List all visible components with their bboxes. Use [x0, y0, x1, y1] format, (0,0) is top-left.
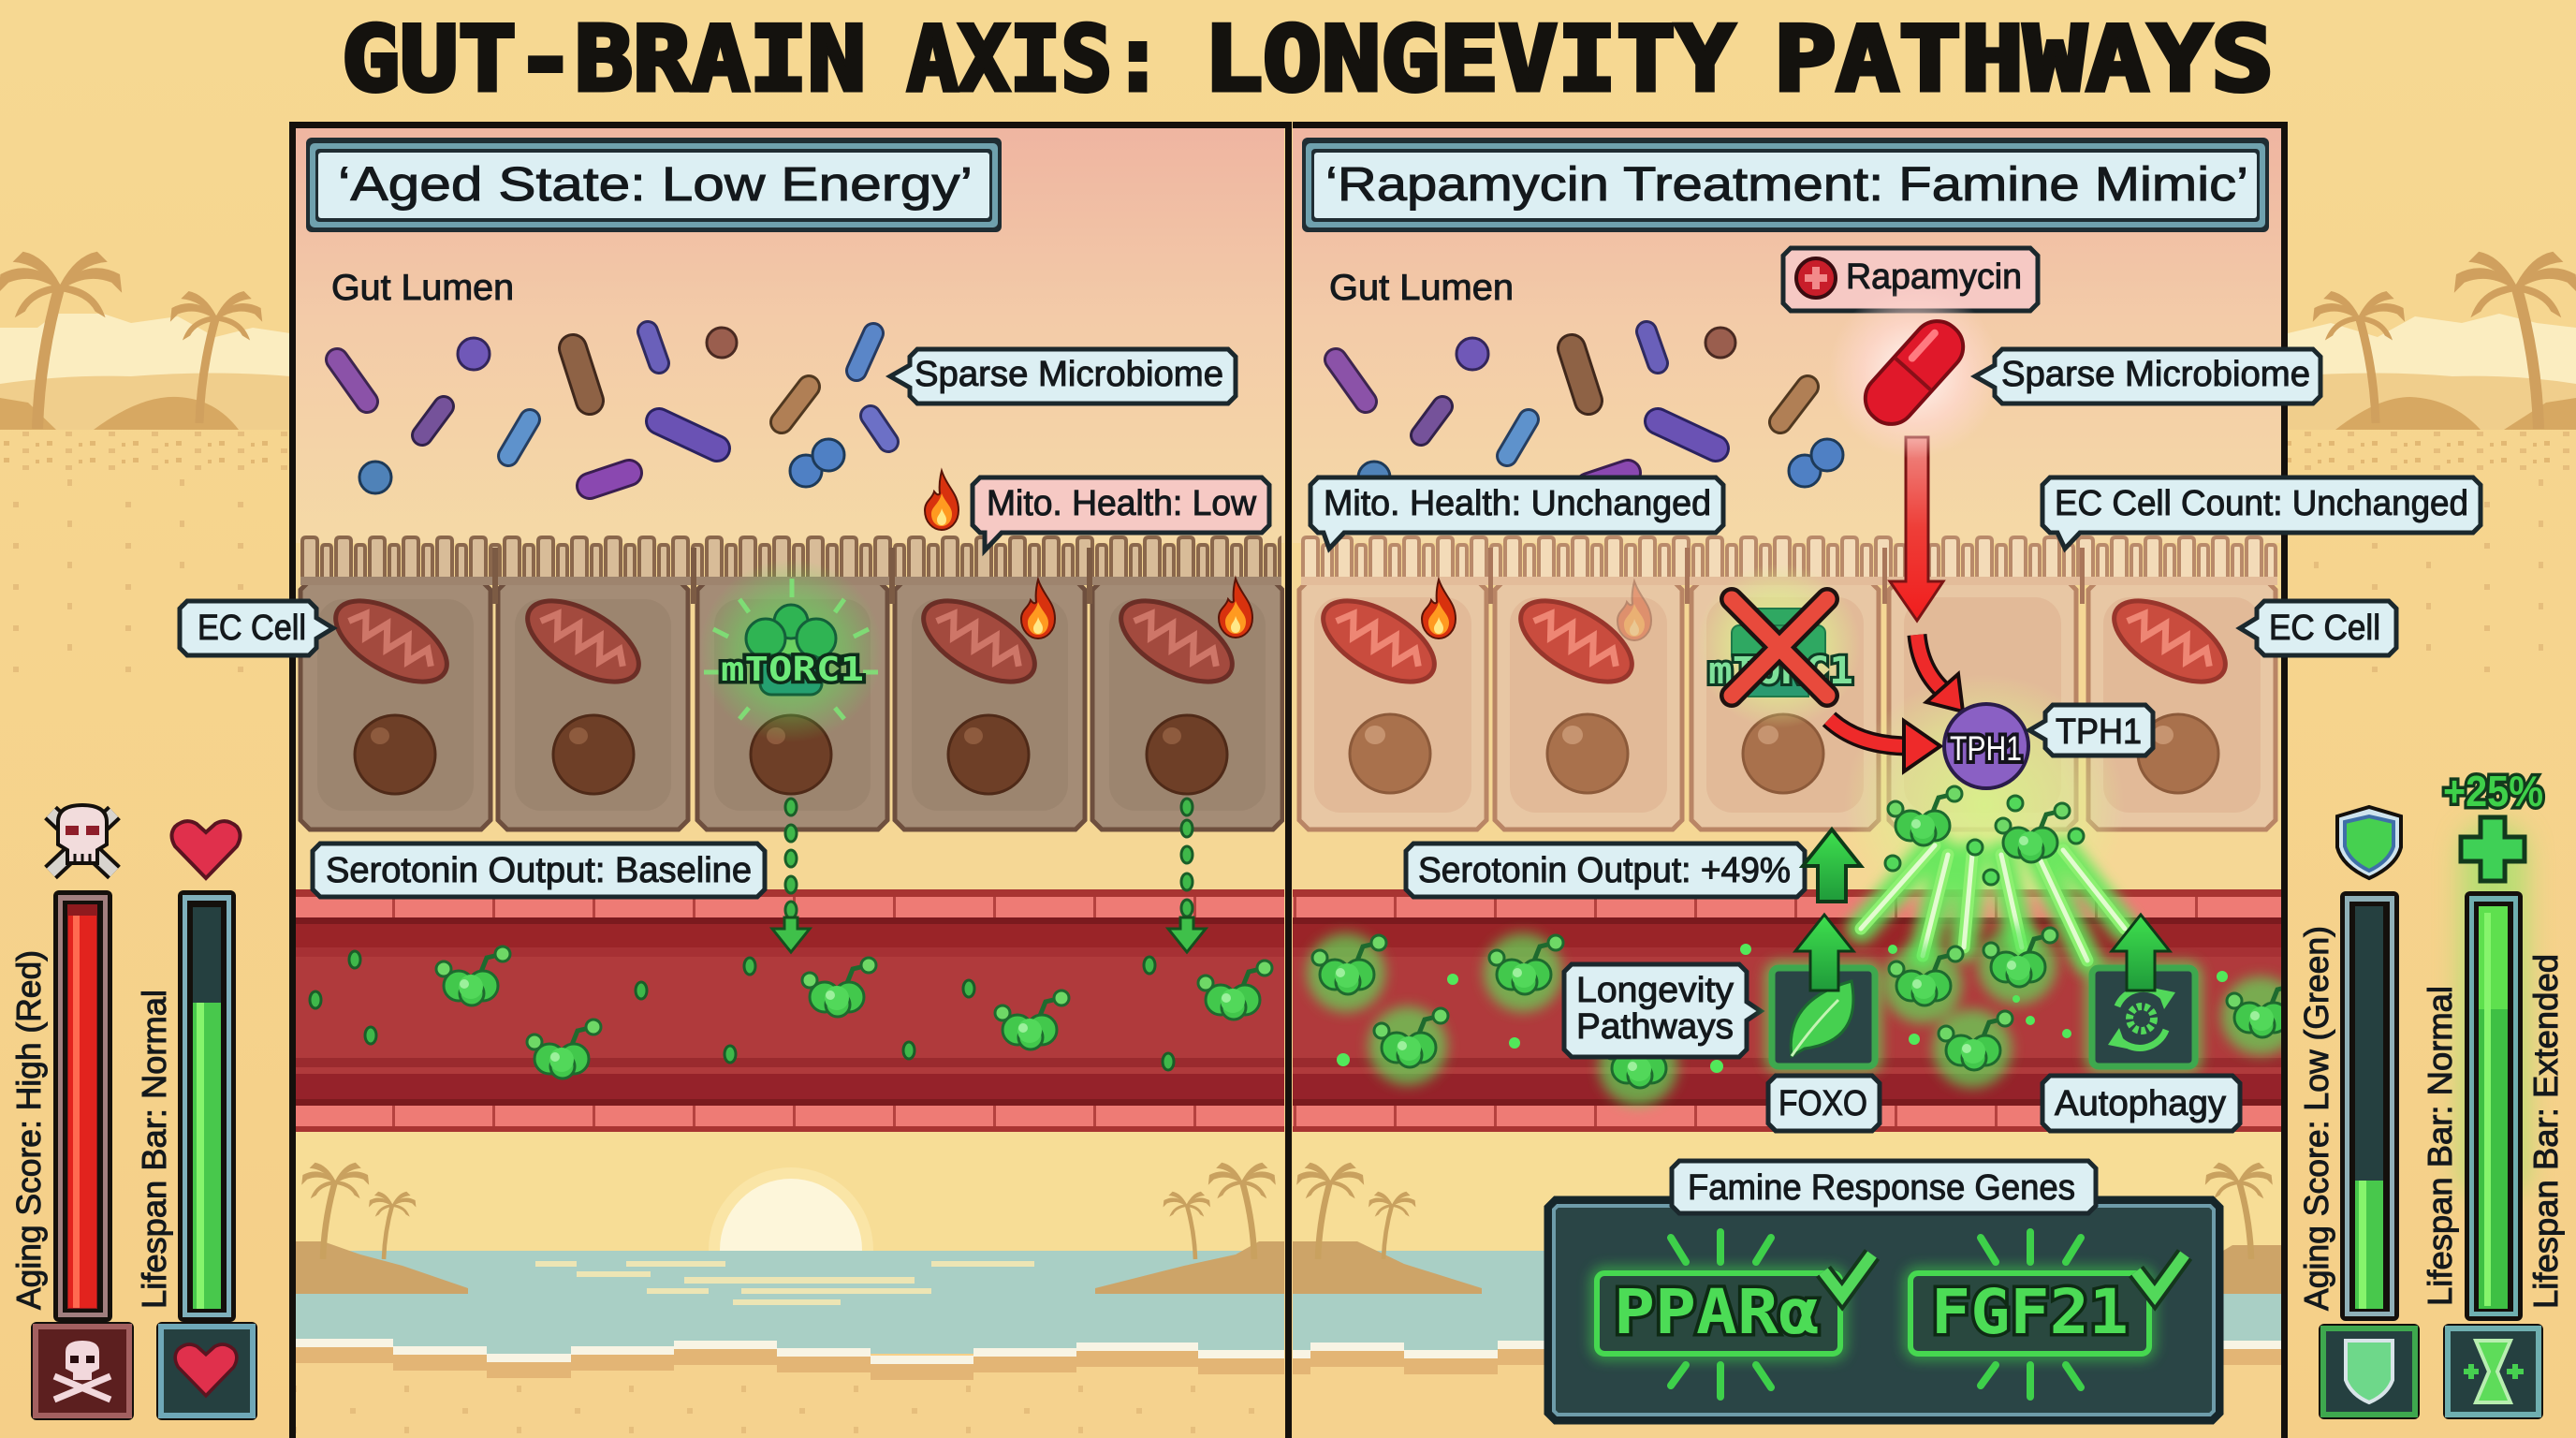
state heading: aged: ‘Aged State: Low Energy’ — [338, 157, 973, 211]
label: famine response genes: Famine Response Genes — [1688, 1168, 2075, 1208]
base: shield — [2319, 1324, 2420, 1419]
label: serotonin +49%: Serotonin Output: +49% — [1418, 851, 1791, 890]
gene: PPAR alpha — [1597, 1232, 1872, 1397]
icon: plus — [2461, 817, 2525, 881]
label: EC cell — [180, 601, 333, 655]
beach scene — [1293, 1132, 2281, 1374]
icon: shield — [2337, 807, 2401, 878]
mitochondria — [333, 598, 1235, 684]
mTORC1 complex: mTORC1 — [721, 651, 864, 689]
bar: lifespan green — [178, 890, 236, 1322]
arrow: curved from mTORC1 to TPH1 — [1829, 719, 1940, 771]
base: hourglass — [2443, 1324, 2543, 1419]
panel: rapamycin treatment — [1293, 122, 2482, 1438]
beach scene — [296, 1132, 1284, 1433]
label: mito health unchanged: Mito. Health: Unchanged — [1324, 484, 1711, 523]
gene: FGF21: FGF21 — [1931, 1276, 2129, 1348]
panel: aged state — [178, 122, 1292, 1438]
label: plus 25 percent: +25% — [2443, 767, 2543, 815]
icon: skull and crossbones — [51, 805, 114, 873]
label: lifespan extended: Lifespan Bar: Extended — [2526, 954, 2565, 1309]
base: heart — [156, 1322, 257, 1420]
arrow: autophagy up — [2112, 915, 2170, 990]
TPH1 enzyme: TPH1 — [1950, 729, 2022, 768]
green serotonin rays — [1861, 845, 2125, 961]
title: PATHWAYS — [1774, 8, 2274, 111]
sparse microbiome bacteria — [1336, 328, 1843, 493]
label: EC cell count unchanged: EC Cell Count: Unchanged — [2055, 484, 2468, 523]
icon: autophagy cycle — [2092, 968, 2195, 1066]
panel border — [292, 125, 1288, 1438]
label: FOXO — [1768, 1076, 1880, 1131]
gene: PPAR alpha: PPARα — [1614, 1276, 1820, 1348]
label: gut lumen: Gut Lumen — [331, 268, 514, 308]
label: autophagy — [2042, 1076, 2240, 1131]
bar: aging red — [53, 890, 112, 1322]
arrow: serotonin release left — [772, 799, 810, 952]
label: longevity pathways — [1564, 964, 1761, 1057]
label: longevity pathways: Longevity — [1576, 971, 1734, 1010]
label: rapamycin: Rapamycin — [1846, 257, 2022, 297]
state heading: rapamycin: ‘Rapamycin Treatment: Famine Mimic’ — [1325, 157, 2248, 211]
bar: lifespan extended — [2465, 891, 2523, 1321]
flames — [1422, 580, 1651, 640]
gauge: aging score low — [2297, 807, 2420, 1419]
arrow: FOXO up — [1795, 915, 1853, 990]
gauge: lifespan extended — [2421, 767, 2543, 1419]
mTORC1 complex — [699, 559, 883, 742]
glow — [2460, 824, 2527, 1198]
flames — [1021, 579, 1252, 638]
title: AXIS: — [907, 8, 1164, 111]
base: skull — [31, 1322, 134, 1420]
label: serotonin baseline — [313, 844, 765, 897]
mitochondria — [1310, 584, 2238, 698]
label: EC cell: EC Cell — [2269, 609, 2380, 648]
label: longevity pathways: Pathways — [1576, 1007, 1734, 1047]
mTORC1 inhibited: mTORC1 — [1708, 650, 1853, 693]
label: FOXO: FOXO — [1778, 1084, 1867, 1123]
arrow: serotonin up — [1803, 829, 1861, 902]
panel: famine response genes — [1548, 1161, 2219, 1420]
arrow: rapamycin down — [1890, 437, 1943, 621]
label: EC cell — [2240, 601, 2396, 655]
label: sparse microbiome — [890, 349, 1236, 404]
arrow: serotonin release right — [1168, 799, 1206, 952]
title: GUT-BRAIN — [342, 8, 866, 111]
label: sparse microbiome: Sparse Microbiome — [915, 355, 1223, 394]
arrow: curved to TPH1 top — [1917, 635, 1963, 712]
label: mito health low — [973, 477, 1269, 550]
label: mito health unchanged — [1310, 477, 1723, 549]
gauge: lifespan normal — [135, 821, 257, 1420]
microvilli — [1301, 534, 2277, 604]
background scene: left palms — [0, 252, 290, 678]
mTORC1 inhibited — [1706, 568, 1855, 725]
label: autophagy: Autophagy — [2055, 1084, 2226, 1123]
label: sparse microbiome — [1975, 349, 2320, 404]
EC cells — [1299, 580, 2276, 829]
title — [342, 8, 2274, 111]
label: aging score high: Aging Score: High (Red) — [9, 950, 48, 1310]
icon: heart — [172, 821, 240, 878]
TPH1 and green glow — [1853, 687, 2115, 932]
bar: aging green — [2340, 891, 2399, 1321]
gauge: aging score high — [9, 805, 134, 1420]
label: mito health low: Mito. Health: Low — [987, 484, 1257, 523]
gene: FGF21 — [1910, 1232, 2185, 1397]
label: lifespan normal: Lifespan Bar: Normal — [135, 990, 173, 1309]
panel border — [1293, 125, 2284, 1438]
blood vessel — [295, 889, 1284, 1132]
microvilli — [300, 534, 1281, 604]
icon: rapamycin pill — [1828, 286, 2000, 459]
serotonin burst — [1885, 786, 2084, 885]
TPH1 enzyme — [1944, 704, 2028, 788]
state heading: rapamycin — [1302, 138, 2269, 232]
serotonin molecules — [1307, 926, 2301, 1106]
nuclei — [1350, 714, 2218, 793]
state heading: aged — [306, 138, 1002, 232]
icon: flame — [925, 471, 959, 530]
label: lifespan normal: Lifespan Bar: Normal — [2421, 986, 2459, 1306]
sparse microbiome bacteria — [337, 328, 888, 493]
serotonin molecules — [310, 946, 1272, 1078]
label: EC cell count unchanged — [2042, 477, 2481, 549]
label: sparse microbiome: Sparse Microbiome — [2001, 355, 2310, 394]
nuclei — [355, 715, 1227, 794]
label: aging score low: Aging Score: Low (Green) — [2297, 926, 2335, 1311]
label: rapamycin — [1783, 248, 2038, 311]
EC cells — [300, 580, 1282, 829]
icon: FOXO leaf — [1772, 968, 1875, 1066]
background scene: right palms — [2288, 252, 2576, 678]
label: gut lumen: Gut Lumen — [1329, 268, 1514, 308]
label: EC cell: EC Cell — [198, 609, 306, 648]
label: serotonin baseline: Serotonin Output: Baseline — [326, 851, 752, 890]
label: TPH1: TPH1 — [2056, 712, 2142, 752]
title: LONGEVITY — [1204, 8, 1734, 111]
label: TPH1 — [2029, 705, 2153, 756]
blood vessel — [1293, 889, 2281, 1132]
